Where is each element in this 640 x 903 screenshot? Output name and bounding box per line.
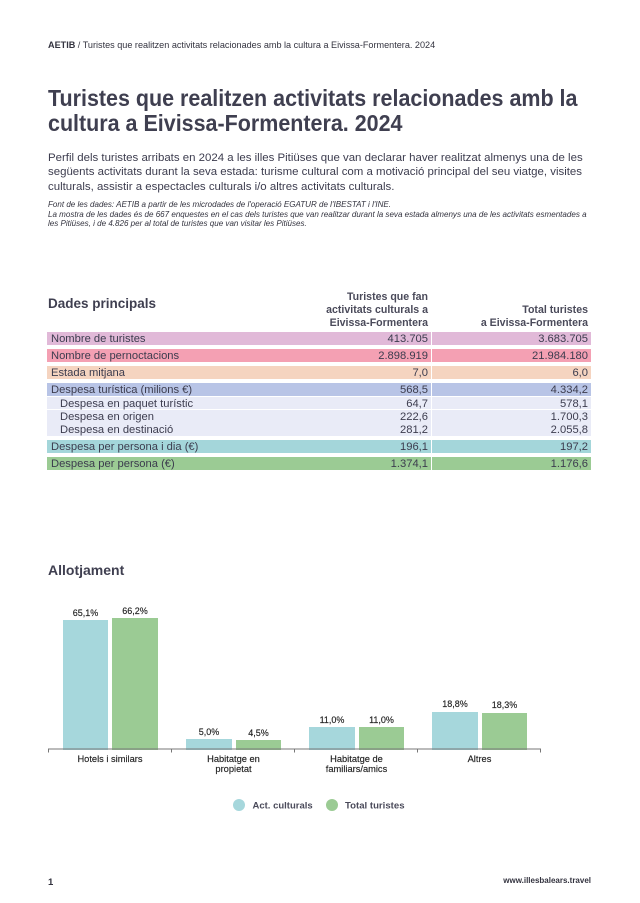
row: despesa en paquet turístic: 578,1 <box>560 398 588 410</box>
group: altres: 18,3% <box>492 700 517 710</box>
row: despesa en origen <box>47 410 591 423</box>
row: despesa turística: Despesa turística (milions €) <box>51 384 192 396</box>
row: despesa en paquet turístic <box>47 397 591 410</box>
row: despesa per persona i dia <box>47 440 591 453</box>
row: nombre de pernoctacions: 2.898.919 <box>378 350 428 362</box>
row: despesa per persona i dia: Despesa per persona i dia (€) <box>51 441 198 453</box>
title <box>48 84 578 136</box>
column header: culturals: activitats culturals a <box>326 304 428 316</box>
row: despesa turística <box>47 383 591 396</box>
row: nombre de turistes: 413.705 <box>388 333 428 345</box>
running header: AETIB / Turistes que realitzen activitats relacionades amb la cultura a Eivissa-Formentera. 2024 <box>48 40 435 50</box>
legend: Total turistes <box>345 800 405 812</box>
row: nombre de turistes: Nombre de turistes <box>51 333 146 345</box>
group: altres: Altres <box>468 754 492 764</box>
row: despesa en destinació <box>47 423 591 436</box>
group: habitatge en propietat: Habitatge en <box>207 754 260 764</box>
row: despesa en origen: Despesa en origen <box>60 411 154 423</box>
row: estada mitjana: 7,0 <box>412 367 428 379</box>
column header: culturals: Eivissa-Formentera <box>330 317 428 329</box>
source note: Font de les dades: AETIB a partir de les microdades de l'operació EGATUR de l'IBESTAT i l'INE. <box>48 200 391 209</box>
row: despesa en destinació: 281,2 <box>400 424 428 436</box>
group: habitatge de familiars/amics <box>309 715 404 774</box>
axis <box>48 749 541 752</box>
row: despesa en destinació: Despesa en destinació <box>60 424 173 436</box>
group: altres: 18,8% <box>442 699 468 709</box>
website: www.illesbalears.travel <box>503 876 591 885</box>
group: hotels i similars <box>63 606 158 764</box>
row: nombre de pernoctacions: 21.984.180 <box>532 350 588 362</box>
legend: Act. culturals <box>252 800 313 812</box>
group: habitatge de familiars/amics: Habitatge de <box>330 754 383 764</box>
title: cultura a Eivissa-Formentera. 2024 <box>48 110 402 136</box>
row: despesa turística: 568,5 <box>400 384 428 396</box>
data table <box>47 332 591 470</box>
column header: culturals <box>326 291 428 329</box>
row: despesa per persona: 1.374,1 <box>391 458 428 470</box>
row: nombre de turistes <box>47 332 591 345</box>
row: nombre de turistes: 3.683.705 <box>538 333 588 345</box>
row: despesa per persona <box>47 457 591 470</box>
row: nombre de pernoctacions: Nombre de pernoctacions <box>51 350 179 362</box>
intro paragraph: Perfil dels turistes arribats en 2024 a les illes Pitiüses que van declarar haver realitzat almenys una de les <box>48 152 583 164</box>
group: altres <box>432 699 527 764</box>
group: habitatge en propietat: 4,5% <box>248 728 269 738</box>
intro paragraph: següents activitats durant la seva estada: turisme cultural com a motivació principal del seu viatge, visites <box>48 166 582 178</box>
row: estada mitjana: 6,0 <box>572 367 588 379</box>
heading: dades principals: Dades principals <box>48 296 156 311</box>
intro paragraph <box>48 152 583 193</box>
row: despesa per persona i dia: 196,1 <box>400 441 428 453</box>
row: despesa en paquet turístic: 64,7 <box>406 398 428 410</box>
row: despesa en origen: 222,6 <box>400 411 428 423</box>
row: despesa en origen: 1.700,3 <box>551 411 588 423</box>
page number: 1 <box>48 877 53 888</box>
legend <box>233 799 405 812</box>
group: habitatge en propietat: 5,0% <box>199 727 219 737</box>
title: Turistes que realitzen activitats relacionades amb la <box>48 84 577 110</box>
group: habitatge de familiars/amics: familiars/amics <box>326 764 388 774</box>
column header: total: Total turistes <box>522 304 588 316</box>
group: habitatge de familiars/amics: 11,0% <box>320 715 344 725</box>
row: despesa en destinació: 2.055,8 <box>551 424 588 436</box>
group: habitatge en propietat <box>186 727 281 774</box>
source note: La mostra de les dades és de 667 enquestes en el cas dels turistes que van realitzar durant la seva estada almenys una de les activitats esmentades a <box>48 210 587 218</box>
group: habitatge de familiars/amics: 11,0% <box>369 715 394 725</box>
group: hotels i similars: 66,2% <box>122 606 148 616</box>
heading: allotjament: Allotjament <box>48 562 124 578</box>
row: despesa per persona i dia: 197,2 <box>560 441 588 453</box>
row: despesa per persona: Despesa per persona (€) <box>51 458 175 470</box>
source note <box>48 200 587 228</box>
row: despesa turística: 4.334,2 <box>551 384 588 396</box>
group: habitatge en propietat: propietat <box>215 764 252 774</box>
intro paragraph: culturals, assistir a espectacles culturals i/o altres activitats culturals. <box>48 181 394 193</box>
row: despesa en paquet turístic: Despesa en paquet turístic <box>60 398 193 410</box>
row: despesa per persona: 1.176,6 <box>551 458 588 470</box>
bar chart: allotjament <box>48 606 541 812</box>
row: nombre de pernoctacions <box>47 349 591 362</box>
row: estada mitjana: Estada mitjana <box>51 367 125 379</box>
column header: culturals: Turistes que fan <box>347 291 428 303</box>
column header: total <box>481 304 588 329</box>
row: estada mitjana <box>47 366 591 379</box>
source note: les Pitiüses, i de 4.826 per al total de turistes que van visitar les Pitiüses. <box>48 219 307 228</box>
group: hotels i similars: Hotels i similars <box>77 754 143 764</box>
column header: total: a Eivissa-Formentera <box>481 317 588 329</box>
group: hotels i similars: 65,1% <box>73 608 98 618</box>
